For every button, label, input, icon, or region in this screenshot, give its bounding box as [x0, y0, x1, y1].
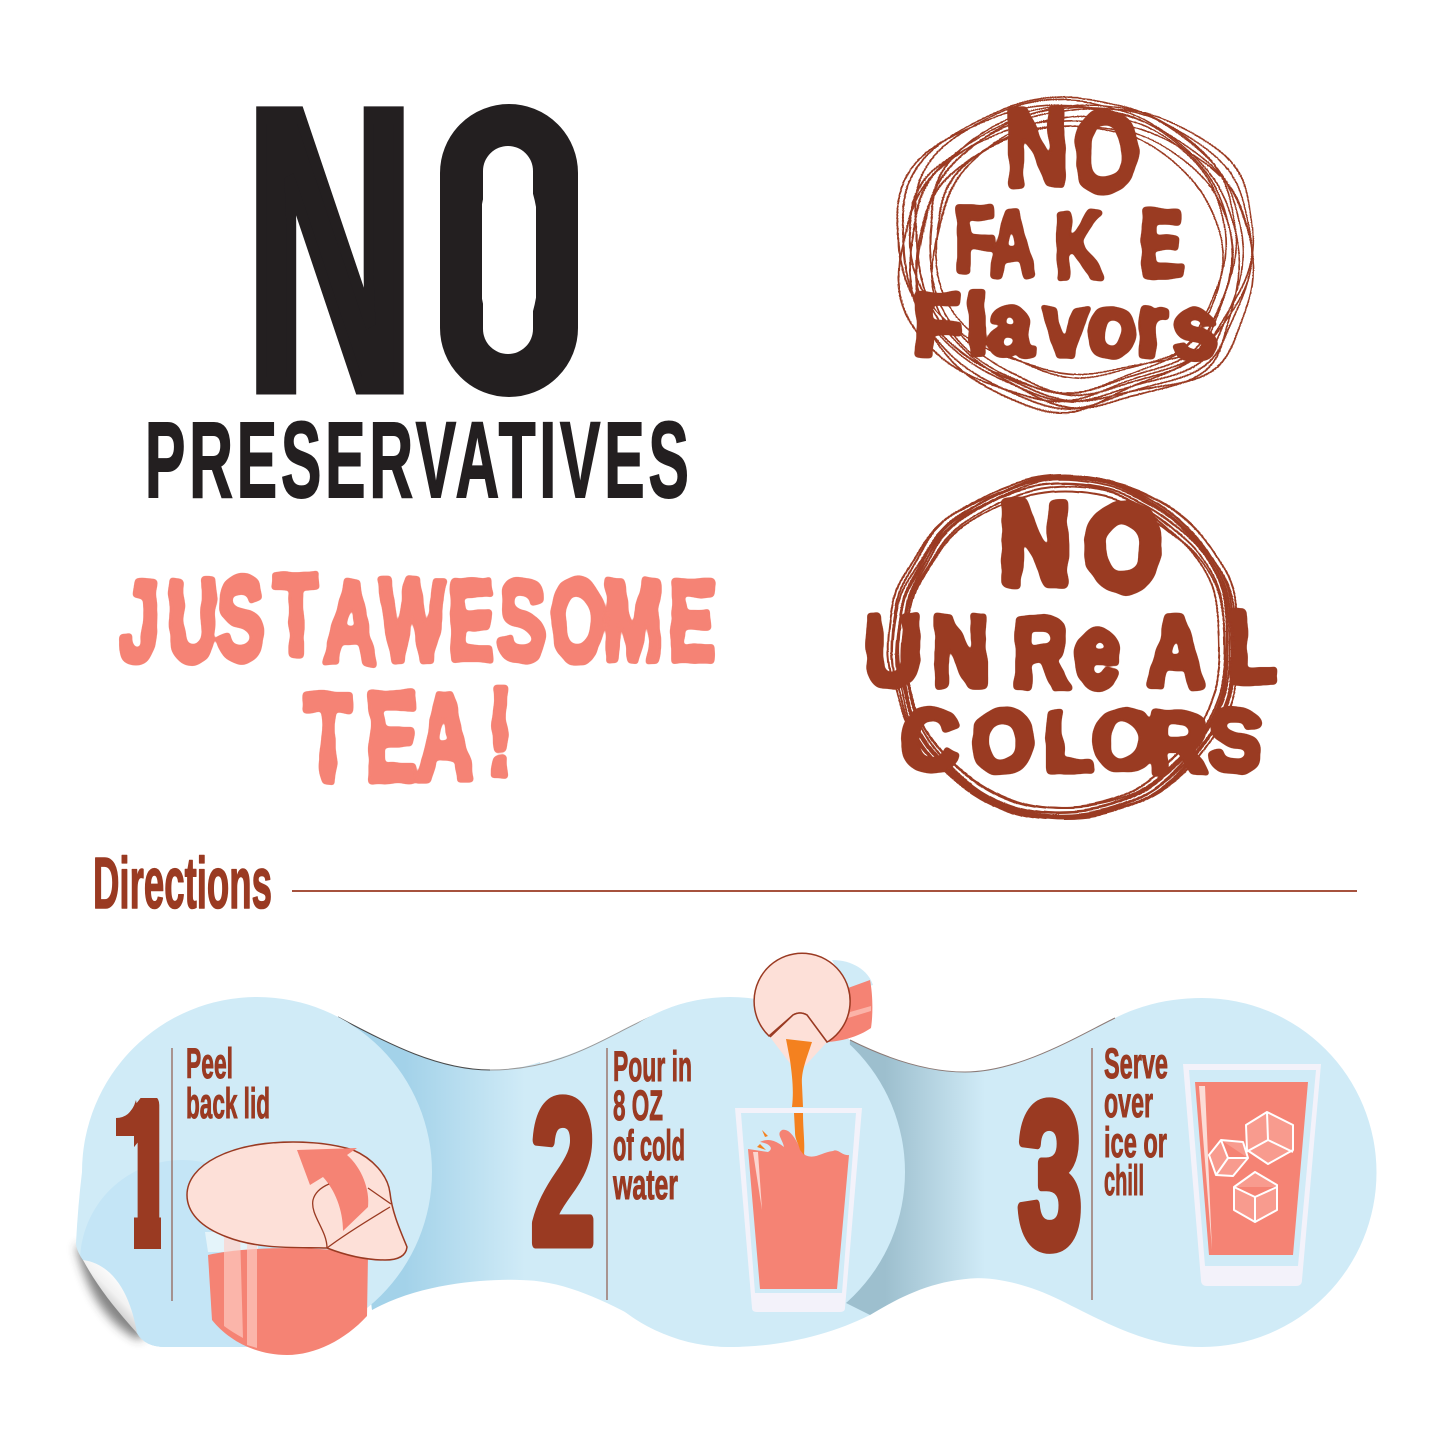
tea stream — [757, 1039, 812, 1155]
slogan: just awesome tea: TEA! — [304, 664, 513, 810]
peel shadow — [76, 1245, 150, 1340]
heading: NO — [246, 30, 573, 470]
cup body — [208, 1248, 368, 1355]
badge text: COLORS — [901, 692, 1262, 790]
peel fold — [83, 1260, 137, 1333]
heading: NO: N — [246, 30, 414, 470]
slogan: just awesome tea: JUST AWESOME — [118, 551, 716, 689]
step 2 circle — [555, 997, 905, 1347]
badge text: NO — [999, 478, 1162, 615]
step 1 number — [116, 1098, 161, 1249]
cup clear rim — [205, 1232, 258, 1252]
glass — [735, 1108, 862, 1312]
slogan: just awesome tea — [118, 551, 716, 810]
ice cubes — [1209, 1112, 1293, 1222]
badge text: NO — [1005, 86, 1140, 216]
glass — [1183, 1064, 1321, 1286]
step 1 label: Peel — [186, 1040, 233, 1088]
step 2 label: 8 OZ — [613, 1082, 663, 1130]
step 2 divider — [606, 1048, 608, 1300]
step 2 label: Pour in — [613, 1043, 692, 1091]
badge text — [864, 478, 1277, 790]
liquid — [748, 1130, 849, 1289]
step 1 sticker — [76, 997, 432, 1364]
panel: wavy directions band — [338, 998, 1376, 1347]
icon: pod pouring into glass — [735, 953, 873, 1312]
heading: directions: Directions — [93, 844, 272, 924]
heading: PRESERVATIVES: PRESERVATIVES — [145, 400, 689, 520]
cup highlights — [224, 1232, 257, 1348]
lid arrow — [297, 1148, 368, 1231]
step 3 label — [1104, 1040, 1168, 1205]
heading: NO: O — [445, 37, 573, 467]
lid face — [770, 1037, 827, 1066]
step 3 label: over — [1104, 1079, 1153, 1127]
badge text — [912, 86, 1218, 377]
step 3 divider — [1091, 1048, 1093, 1300]
lighter lower blob — [80, 1160, 279, 1347]
shadow behind first circle — [338, 1017, 540, 1310]
badge text: UNReAL — [864, 593, 1277, 709]
highlight — [1199, 1086, 1212, 1250]
step 2 label: of cold — [613, 1122, 685, 1170]
step 3 label: Serve — [1104, 1040, 1168, 1088]
scribble ring — [856, 40, 1297, 470]
badge: no fake flavors — [856, 40, 1297, 470]
badge text: Flavors — [912, 276, 1218, 377]
scribble ring — [830, 411, 1306, 883]
sticker circle — [76, 997, 432, 1347]
pod body — [828, 980, 872, 1042]
step 2 number: 2 — [531, 1059, 595, 1287]
step 3 label: chill — [1104, 1157, 1144, 1205]
lid fold lines — [313, 1184, 391, 1248]
step 1 label — [186, 1040, 270, 1128]
step 3 label: ice or — [1104, 1119, 1167, 1167]
step 3 number: 3 — [1018, 1062, 1082, 1290]
step 2 label — [612, 1043, 692, 1209]
badge: no unreal colors — [830, 411, 1306, 883]
liquid — [1195, 1082, 1308, 1255]
step 1 divider — [171, 1048, 173, 1301]
step 1 label: back lid — [186, 1080, 270, 1128]
icon: iced tea glass — [1183, 1064, 1321, 1286]
step 1 number: 1 — [117, 1061, 175, 1290]
step 2 label: water — [612, 1161, 678, 1209]
badge text: FAKE — [955, 187, 1183, 299]
icon: peeling cup — [187, 1142, 407, 1355]
pod back — [832, 960, 873, 992]
band silhouette — [338, 998, 1376, 1347]
lid — [187, 1142, 407, 1260]
shadow behind second circle — [840, 1040, 985, 1315]
